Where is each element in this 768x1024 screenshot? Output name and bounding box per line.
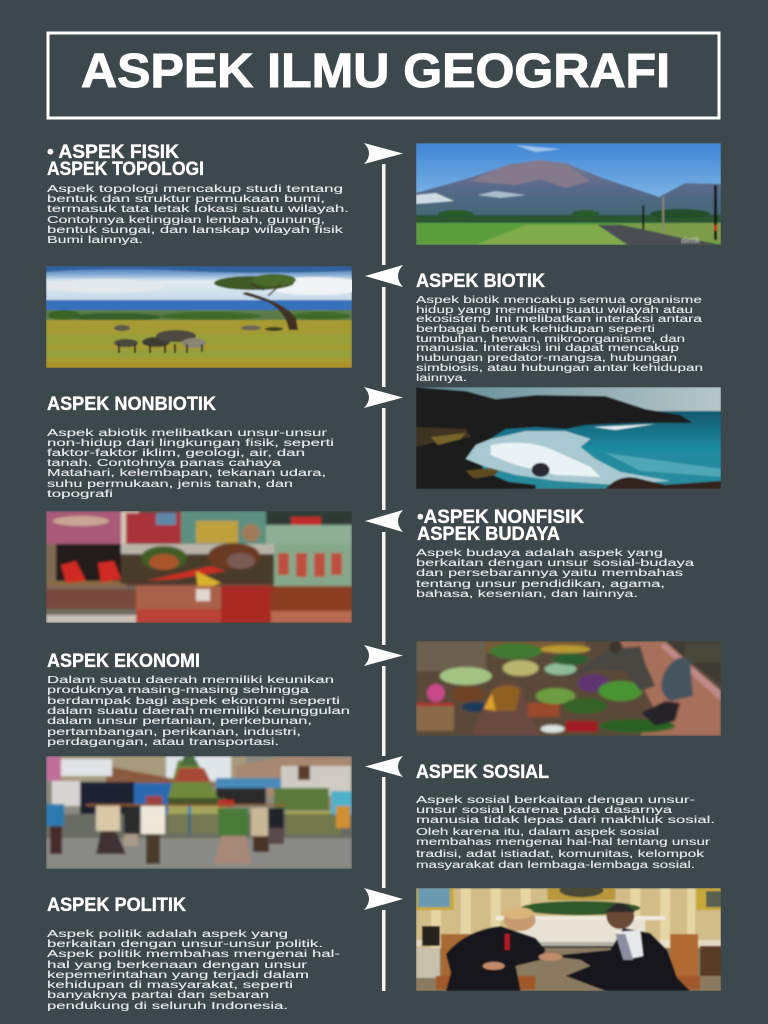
body: nonbiotik: topografi xyxy=(47,489,113,500)
body: topologi: Contohnya ketinggian lembah, gunung, xyxy=(47,215,325,226)
heading: aspek biotik: ASPEK BIOTIK xyxy=(416,271,545,292)
body: sosial: unsur sosial karena pada dasarnya xyxy=(416,805,673,816)
arrow: left to photo 6 xyxy=(365,756,403,777)
arrow: right to photo 3 xyxy=(364,387,403,408)
body: sosial: masyarakat dan lembaga-lembaga sosial. xyxy=(416,860,695,871)
photo: culture collage xyxy=(46,511,352,623)
body: politik xyxy=(47,929,340,1012)
body: politik: Aspek politik membahas mengenai hal- xyxy=(47,949,340,960)
heading: aspek nonbiotik: ASPEK NONBIOTIK xyxy=(47,394,216,415)
timeline xyxy=(364,143,403,991)
text block: aspek budaya xyxy=(416,507,695,600)
body: sosial: Aspek sosial berkaitan dengan unsur- xyxy=(416,795,695,806)
body: biotik: simbiosis, atau hubungan antar kehidupan xyxy=(416,363,703,374)
arrow: right to photo 1 xyxy=(364,143,403,164)
body: budaya xyxy=(416,548,695,600)
body: ekonomi: produknya masing-masing sehingga xyxy=(47,685,310,696)
body: budaya: berkaitan dengan unsur sosial-budaya xyxy=(416,558,695,569)
body: topologi: Bumi lainnya. xyxy=(47,235,143,246)
text block: aspek biotik xyxy=(416,271,703,384)
heading: aspek sosial: ASPEK SOSIAL xyxy=(416,762,549,783)
photo: oval office xyxy=(416,888,721,991)
body: nonbiotik: suhu permukaan, jenis tanah, dan xyxy=(47,479,293,490)
body: biotik: ekosistem. Ini melibatkan interaksi antara xyxy=(416,314,703,325)
body: nonbiotik: non-hidup dari lingkungan fisik, seperti xyxy=(47,438,334,449)
body: topologi: Aspek topologi mencakup studi tentang xyxy=(47,184,343,195)
arrow: right to photo 7 xyxy=(364,888,403,910)
body: politik: hal yang berkenaan dengan unsur xyxy=(47,960,308,971)
body: biotik: manusia. Interaksi ini dapat mencakup xyxy=(416,343,680,354)
heading: aspek fisik: ASPEK TOPOLOGI xyxy=(47,159,204,180)
body: topologi: bentuk sungai, dan lanskap wilayah fisik xyxy=(47,225,343,236)
body: ekonomi xyxy=(47,675,350,748)
body: nonbiotik: Matahari, kelembapan, tekanan udara, xyxy=(47,468,326,479)
heading: aspek nonfisik: •ASPEK NONFISIK xyxy=(417,507,584,528)
body: biotik: berbagai bentuk kehidupan seperti xyxy=(416,324,655,335)
body: nonbiotik: tanah. Contohnya panas cahaya xyxy=(47,458,282,469)
body: biotik: lainnya. xyxy=(416,373,467,384)
photo: mountain xyxy=(416,143,721,245)
body: ekonomi: berdampak bagi aspek ekonomi seperti xyxy=(47,696,340,707)
text block: aspek nonbiotik xyxy=(47,394,334,500)
title banner xyxy=(48,33,719,118)
body: politik: kehidupan di masyarakat, seperti xyxy=(47,980,293,991)
body: budaya: Aspek budaya adalah aspek yang xyxy=(416,548,663,559)
photo: street parade xyxy=(46,756,352,869)
body: biotik: tumbuhan, hewan, mikroorganisme, dan xyxy=(416,334,685,345)
body: politik: pendukung di seluruh Indonesia. xyxy=(47,1001,288,1012)
body: ekonomi: perdagangan, atau transportasi. xyxy=(47,737,279,748)
heading: aspek politik: ASPEK POLITIK xyxy=(47,895,186,916)
body: topologi xyxy=(47,184,349,246)
body: politik: berkaitan dengan unsur-unsur politik. xyxy=(47,939,323,950)
heading: aspek fisik xyxy=(47,142,204,180)
arrow: right to photo 5 xyxy=(364,645,403,666)
arrow: left to photo 4 xyxy=(365,510,403,532)
body: budaya: dan persebarannya yaitu membahas xyxy=(416,568,683,579)
body: sosial: manusia tidak lepas dari makhluk sosial. xyxy=(416,815,715,826)
body: nonbiotik: Aspek abiotik melibatkan unsur-unsur xyxy=(47,428,328,439)
heading: aspek ekonomi: ASPEK EKONOMI xyxy=(47,651,200,672)
body: ekonomi: dalam suatu daerah memiliki keunggulan xyxy=(47,706,350,717)
text block: aspek sosial xyxy=(416,762,715,871)
photo: mountain: detik xyxy=(681,236,700,245)
heading: aspek nonfisik: ASPEK BUDAYA xyxy=(417,524,560,545)
body: sosial: Oleh karena itu, dalam aspek sosial xyxy=(416,827,659,838)
body: topologi: termasuk tata letak lokasi suatu wilayah. xyxy=(47,204,349,215)
text block: aspek fisik / topologi xyxy=(47,142,349,246)
body: nonbiotik: faktor-faktor iklim, geologi, air, dan xyxy=(47,448,305,459)
body: sosial xyxy=(416,795,715,871)
body: biotik xyxy=(416,295,703,384)
title: ASPEK ILMU GEOGRAFI xyxy=(81,45,670,98)
arrow: left to photo 2 xyxy=(365,265,403,287)
body: ekonomi: pertambangan, perikanan, industri, xyxy=(47,727,301,738)
photo: rocky coast xyxy=(416,387,721,489)
photo: savanna xyxy=(46,266,352,368)
body: politik: Aspek politik adalah aspek yang xyxy=(47,929,288,940)
body: budaya: bahasa, kesenian, dan lainnya. xyxy=(416,589,638,600)
body: topologi: bentuk dan struktur permukaan bumi, xyxy=(47,194,325,205)
text block: aspek ekonomi xyxy=(47,651,350,748)
body: nonbiotik xyxy=(47,428,334,500)
body: ekonomi: Dalam suatu daerah memiliki keunikan xyxy=(47,675,334,686)
body: ekonomi: dalam unsur pertanian, perkebunan, xyxy=(47,716,312,727)
body: biotik: hidup yang mendiami suatu wilayah atau xyxy=(416,305,693,316)
heading: aspek fisik: • ASPEK FISIK xyxy=(47,142,179,163)
text block: aspek politik xyxy=(47,895,340,1012)
body: politik: kepemerintahan yang terjadi dalam xyxy=(47,970,309,981)
body: sosial: tradisi, adat istiadat, komunitas, kelompok xyxy=(416,849,704,860)
body: sosial: membahas mengenai hal-hal tentang unsur xyxy=(416,837,711,848)
body: biotik: Aspek biotik mencakup semua organisme xyxy=(416,295,703,306)
body: politik: banyaknya partai dan sebaran xyxy=(47,990,269,1001)
heading: aspek nonfisik xyxy=(417,507,584,545)
photo: market xyxy=(416,641,721,736)
body: budaya: tentang unsur pendidikan, agama, xyxy=(416,579,665,590)
body: biotik: hubungan predator-mangsa, hubungan xyxy=(416,353,677,364)
